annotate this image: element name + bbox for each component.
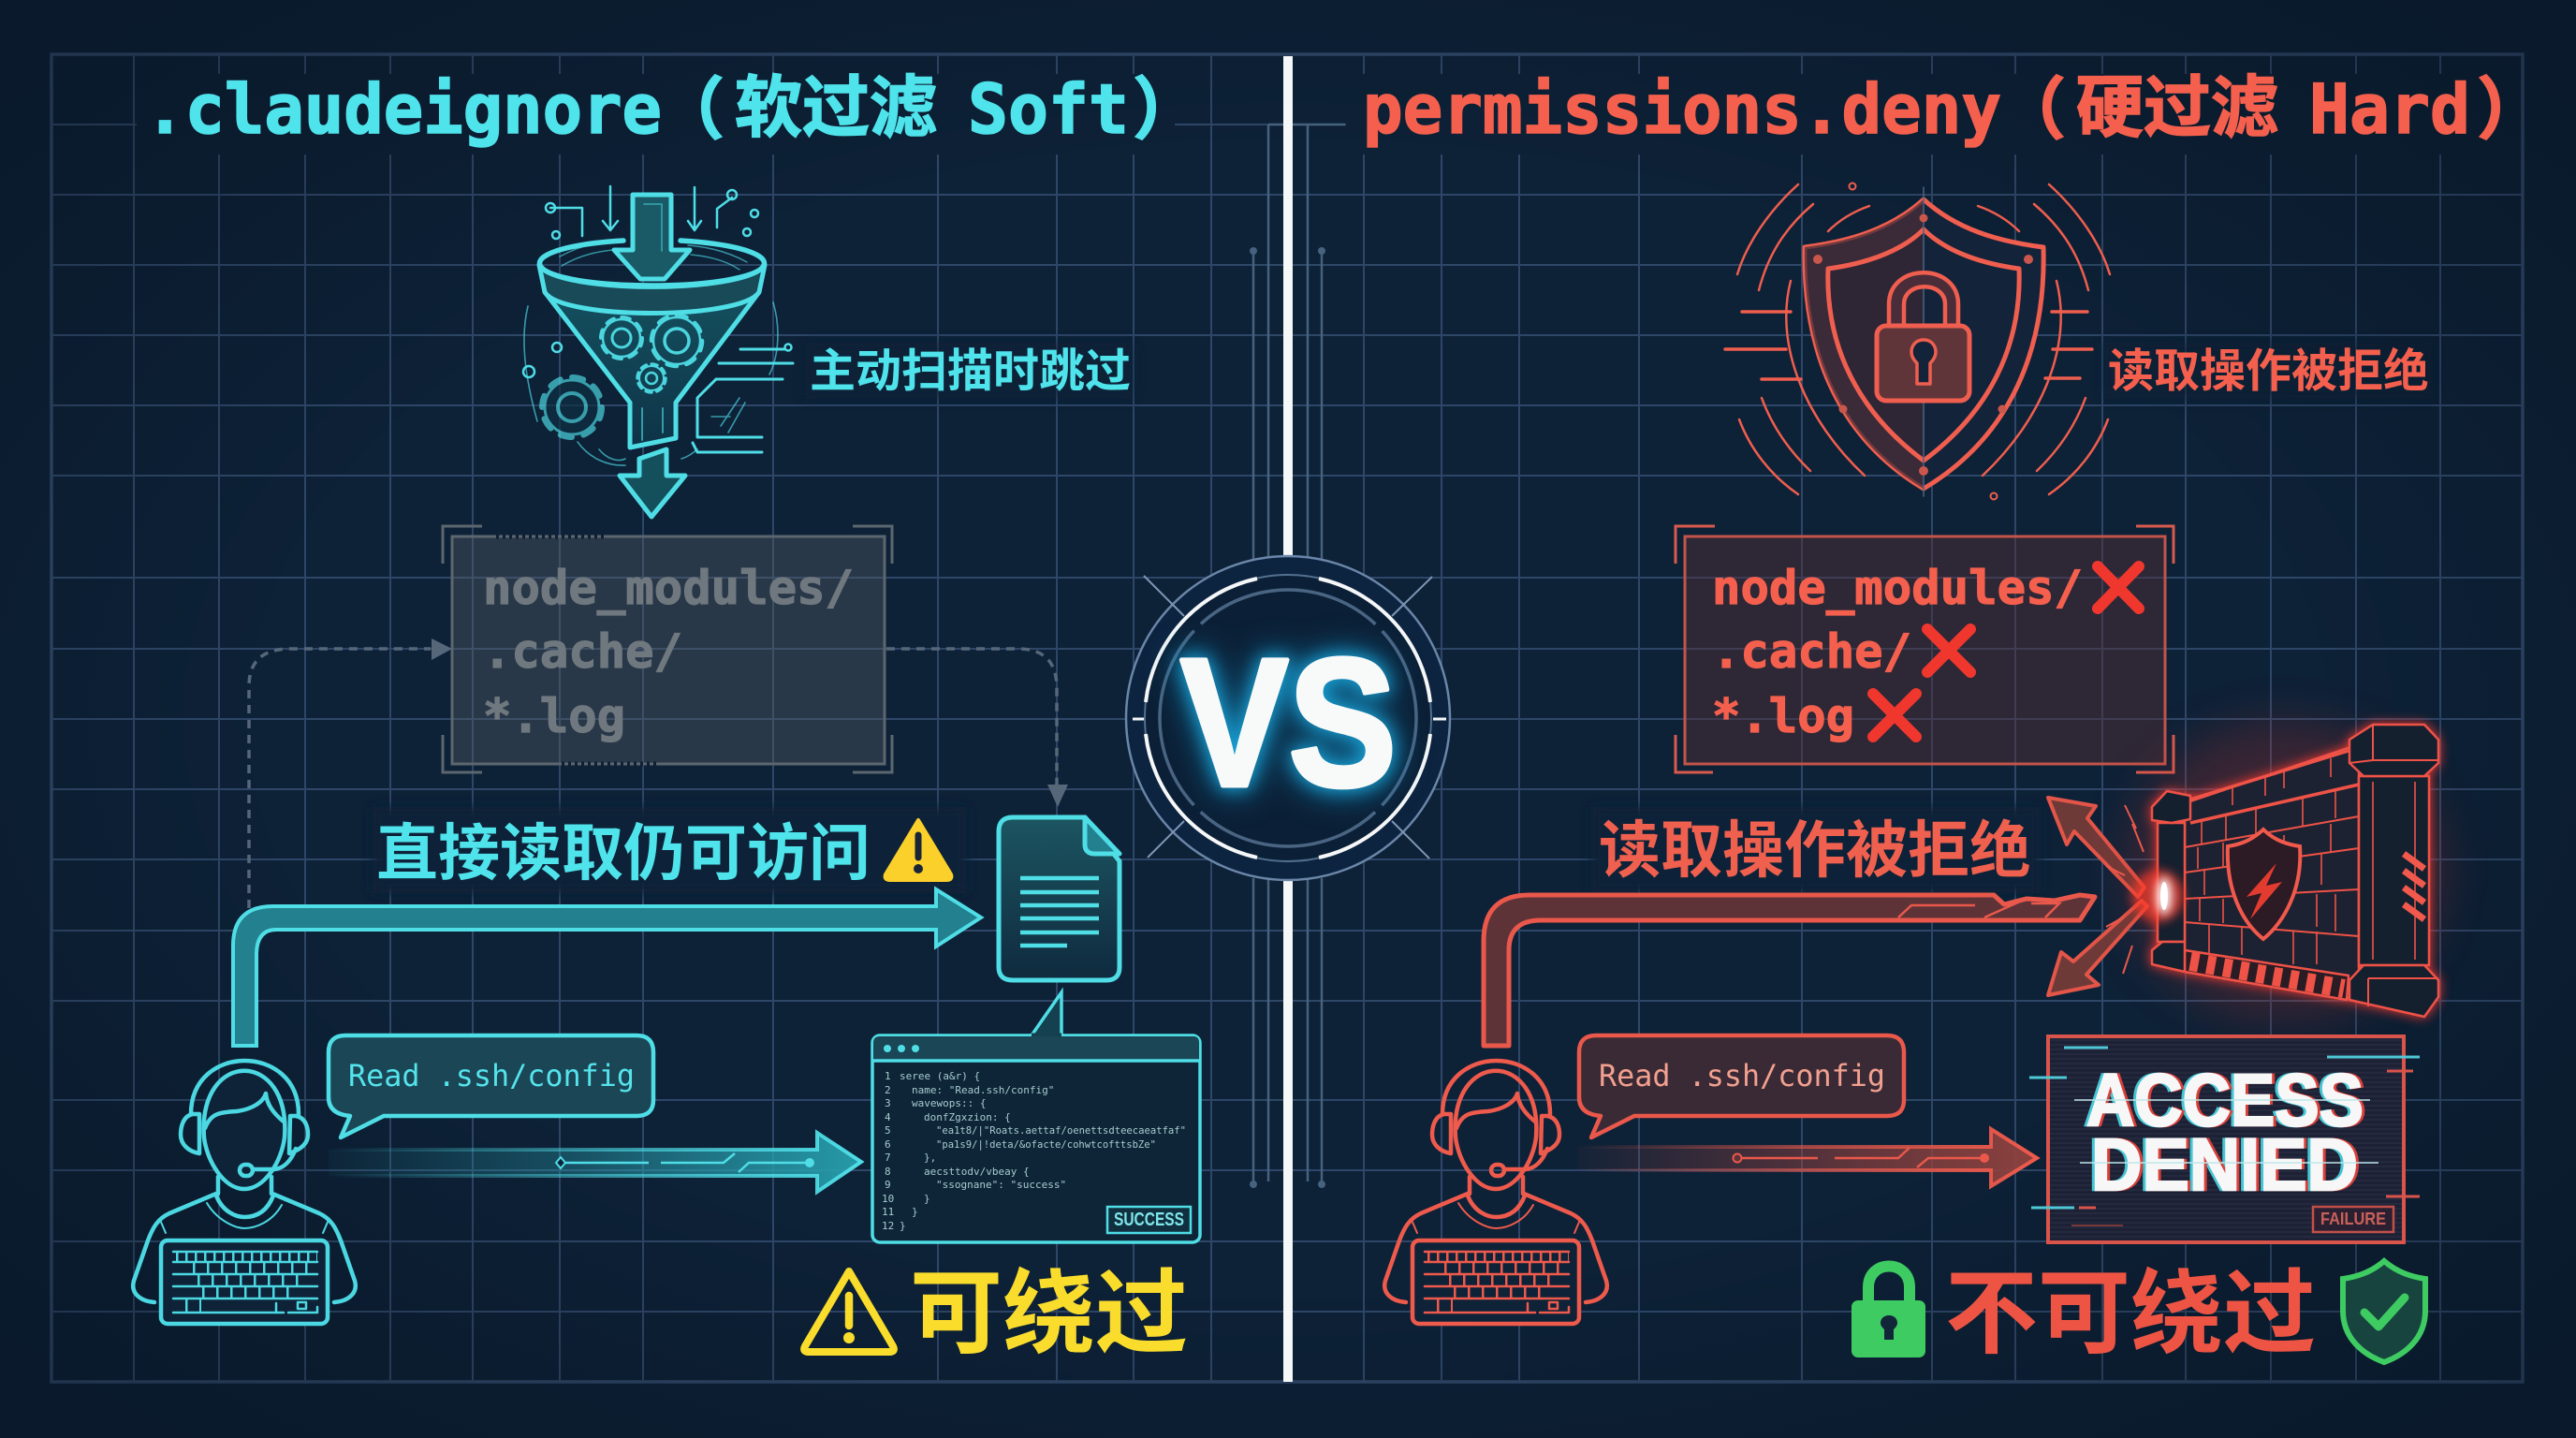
speech bubble: read ssh config: Read .ssh/config	[1599, 1058, 1885, 1093]
code box: ignored patterns (greyed): node_modules/	[483, 561, 854, 615]
code lines: }	[900, 1220, 906, 1232]
code lines: 3	[885, 1097, 891, 1109]
label: read rejected big: 读取操作被拒绝	[1599, 815, 2031, 885]
code lines: "pa1s9/|!deta/&ofacte/cohwtcofttsbZe"	[936, 1138, 1156, 1151]
code lines: 2	[885, 1084, 891, 1096]
label: active scan skipped: 主动扫描时跳过	[810, 346, 1131, 397]
terminal: success output	[872, 992, 1200, 1242]
code box: ignored patterns (greyed): .cache/	[483, 624, 682, 679]
bottom arrow	[620, 449, 685, 517]
code lines: 6	[885, 1138, 891, 1151]
circuit details	[523, 186, 793, 465]
heading: claudeignore: Soft	[968, 70, 1129, 150]
code lines: 10	[882, 1193, 894, 1205]
label: read operation rejected: 读取操作被拒绝	[2108, 346, 2429, 397]
badge: success: SUCCESS	[1114, 1210, 1184, 1230]
badge: failure: FAILURE	[2320, 1210, 2386, 1228]
icon: funnel with gears	[523, 186, 793, 517]
heading: permissions deny: Hard	[2309, 70, 2470, 150]
code lines: 9	[885, 1179, 891, 1191]
hazard stripes	[2185, 950, 2349, 1000]
icon: user with headset and keyboard	[1384, 1061, 1607, 1324]
icon: user with headset and keyboard	[133, 1061, 356, 1324]
speech bubble: read ssh config: Read .ssh/config	[348, 1058, 635, 1093]
code lines: "ssognane": "success"	[936, 1179, 1066, 1191]
code box: denied patterns: *.log	[1712, 689, 1854, 743]
arrowhead: into box	[432, 638, 452, 660]
VS text: VS	[1180, 621, 1397, 825]
icon: document	[999, 817, 1120, 980]
label: direct read still accessible: 直接读取仍可访问	[376, 818, 871, 888]
heading: claudeignore	[145, 70, 1200, 150]
code lines: aecsttodv/vbeay {	[924, 1166, 1030, 1178]
heading: permissions deny	[1363, 70, 2544, 150]
heading: permissions deny: ）	[2477, 73, 2544, 148]
heading: claudeignore: ）	[1133, 73, 1200, 148]
VS badge	[1126, 556, 1450, 880]
code lines: name: "Read.ssh/config"	[912, 1084, 1054, 1096]
text: access denied	[2086, 1058, 2364, 1206]
arrow: tool call to terminal	[329, 1133, 861, 1192]
code lines: donfZgxzion: {	[924, 1111, 1011, 1123]
text: access denied: DENIED	[2091, 1123, 2358, 1206]
badge: success	[1107, 1207, 1191, 1233]
icon: shield with padlock	[1725, 183, 2110, 500]
code lines: 8	[885, 1166, 891, 1178]
code lines: 4	[885, 1111, 891, 1123]
icon: deny crosses	[1873, 566, 2139, 737]
text: access denied: ACCESS	[2086, 1058, 2364, 1141]
code lines	[882, 1070, 1186, 1232]
code box: denied patterns: node_modules/	[1712, 561, 2083, 615]
code lines: seree (a&r) {	[900, 1070, 980, 1082]
code lines: }	[912, 1206, 918, 1218]
right pillar	[2359, 776, 2429, 965]
gears	[542, 315, 702, 437]
code lines: 1	[885, 1070, 891, 1082]
icon: firewall wall with shield	[2106, 721, 2443, 1020]
icon: green padlock	[1852, 1266, 1925, 1357]
heading: permissions deny: 硬过滤	[2076, 71, 2278, 146]
icon: warning triangle small	[886, 820, 951, 880]
top arrow	[614, 195, 690, 279]
heading: claudeignore: .claudeignore	[145, 70, 662, 150]
code lines: }	[924, 1193, 930, 1205]
code lines: "ea1t8/|"Roats.aettaf/oenettsdteecaeatfaf"	[936, 1124, 1186, 1137]
panel: access denied screen	[2029, 1036, 2420, 1242]
icon: warning triangle outline	[804, 1271, 894, 1352]
code lines: 12	[882, 1220, 894, 1232]
padlock	[1889, 272, 1958, 328]
speech bubble: read ssh config	[329, 1035, 653, 1137]
code box: ignored patterns (greyed): *.log	[483, 689, 625, 743]
dashed line from box to document	[886, 649, 1057, 785]
panel: claudeignore soft filter	[133, 70, 1200, 1365]
code lines: 5	[885, 1124, 891, 1137]
code box: denied patterns: .cache/	[1712, 624, 1911, 679]
heading: claudeignore: （	[657, 73, 724, 148]
arrow: tool call to access denied	[1577, 1129, 2037, 1186]
code box: denied patterns	[1676, 526, 2174, 772]
heading: permissions deny: permissions.deny	[1363, 70, 2001, 150]
code box: ignored patterns (greyed)	[443, 526, 892, 772]
dashed bypass line into box	[249, 649, 431, 908]
arrowhead: into document	[1047, 785, 1068, 807]
center divider	[1250, 56, 1345, 1382]
arrow: direct read to document	[233, 889, 981, 1046]
code lines: wavewops:: {	[912, 1097, 986, 1109]
arrows: deflected up and down	[2048, 798, 2147, 995]
verdict: not bypassable: 不可绕过	[1945, 1261, 2316, 1365]
grid masks behind titles and labels	[137, 74, 2521, 893]
panel: permissions deny hard filter	[1363, 70, 2544, 1365]
left pillar	[2158, 823, 2185, 942]
speech bubble: read ssh config	[1579, 1035, 1904, 1137]
impact flash	[2131, 870, 2184, 922]
heading: permissions deny: （	[1998, 73, 2066, 148]
arrow: blocked read	[1484, 895, 2095, 1046]
heading: claudeignore: 软过滤	[735, 71, 937, 146]
shield emblem on wall	[2228, 829, 2300, 939]
verdict: bypassable: 可绕过	[910, 1261, 1188, 1365]
code lines: },	[924, 1152, 936, 1164]
code lines: 7	[885, 1152, 891, 1164]
radiating arcs	[1737, 184, 2110, 494]
icon: green shield check	[2343, 1261, 2425, 1362]
badge: failure	[2313, 1207, 2393, 1232]
code lines: 11	[882, 1206, 894, 1218]
